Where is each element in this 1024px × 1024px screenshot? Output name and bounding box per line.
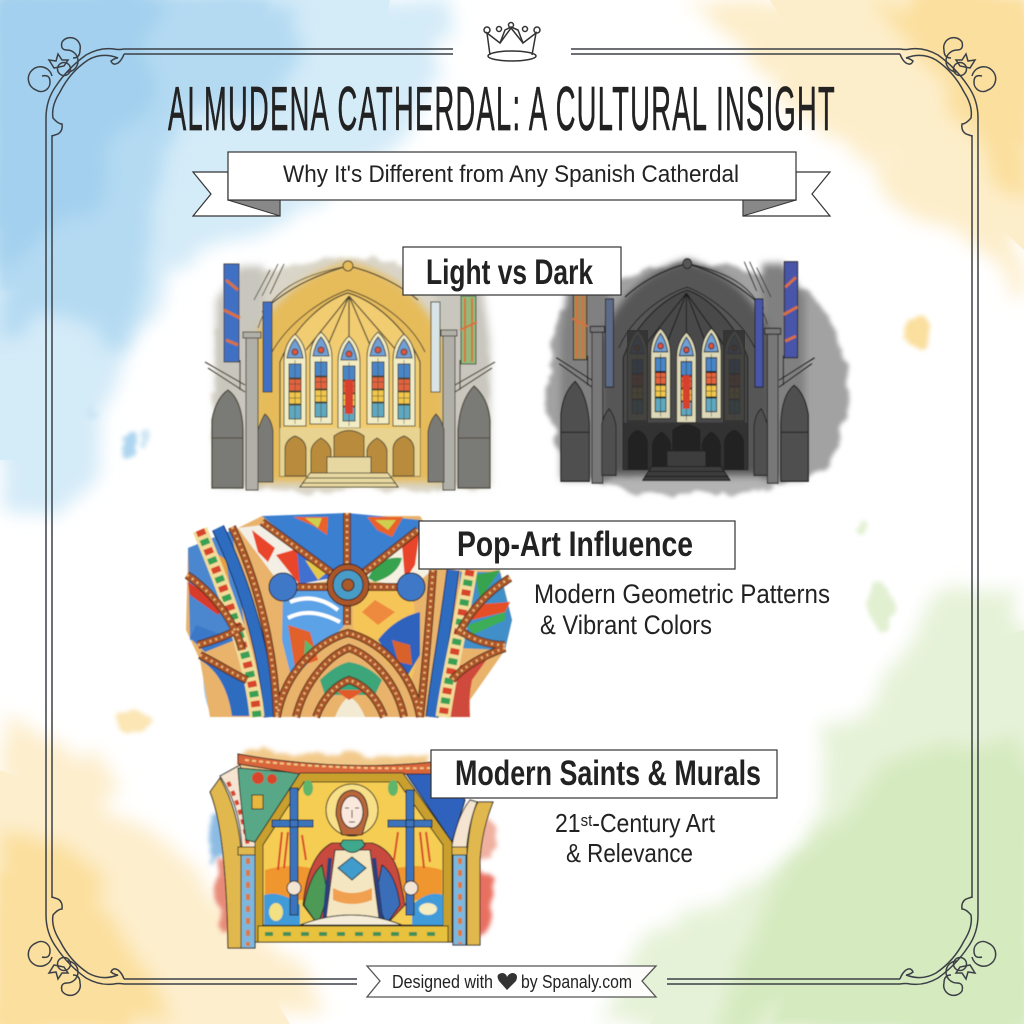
ribbon: right tail — [743, 172, 830, 216]
mural: left capital — [238, 847, 255, 855]
vault: blue bands — [218, 528, 453, 717]
vault: lower right orange panel — [353, 590, 420, 685]
frame: top left corner — [28, 38, 124, 136]
dark wash — [545, 266, 846, 491]
illustration: light cathedral interior — [205, 258, 495, 492]
label text: Modern Saints & Murals — [455, 754, 761, 793]
caption line 1: 21 — [555, 808, 584, 838]
vault: ornament strips — [200, 530, 470, 717]
rib: outline — [187, 513, 510, 717]
label box — [431, 750, 777, 798]
mural: right gold band — [467, 802, 493, 945]
mural: right ornament strip — [452, 800, 477, 855]
caption line 1: st — [581, 811, 593, 830]
mural: hands — [287, 881, 301, 895]
subtitle ribbon — [193, 152, 830, 216]
mural: red ribbons — [278, 832, 430, 870]
vault: top panels — [262, 513, 420, 585]
vault: central boss — [327, 564, 369, 606]
vault: left outer panels — [188, 530, 246, 640]
icon: crown — [484, 22, 540, 61]
label: Pop-Art Influence — [419, 521, 735, 569]
icon: heart — [498, 973, 517, 990]
mural: watercolor edges — [210, 752, 497, 940]
mural: hair and face — [336, 790, 368, 835]
mural: left spandrel floral — [238, 768, 300, 842]
wash: blue upper left — [0, 0, 440, 505]
label: Light vs Dark — [403, 247, 621, 295]
footer ribbon — [367, 966, 656, 997]
rib: dots — [187, 513, 510, 717]
illustration: pop-art vault — [186, 513, 512, 717]
caption line 2: & Vibrant Colors — [540, 610, 712, 640]
footer band — [367, 966, 656, 997]
frame: top right corner — [900, 38, 996, 136]
nave drawing — [205, 261, 495, 490]
mural: top arch band — [238, 754, 432, 774]
ribbon: folds — [228, 200, 796, 216]
caption: saints — [555, 808, 716, 868]
vault: orange chevrons — [293, 517, 403, 537]
mural: robe — [303, 843, 405, 925]
wash: yellow lower left — [0, 720, 330, 1024]
illustration: modern saint mural — [210, 752, 497, 948]
wash: yellow upper right — [700, 0, 1024, 300]
label text: Pop-Art Influence — [457, 525, 693, 564]
label text: Light vs Dark — [426, 253, 593, 292]
mural: base — [300, 915, 402, 925]
vault: lower left blue panel — [282, 590, 344, 680]
vault: lower left quarter — [200, 655, 250, 716]
mural: blue pools — [264, 894, 443, 925]
mural: bottom ornament band — [258, 926, 448, 942]
vault: upper right panel — [360, 530, 432, 586]
vault: side bosses — [269, 573, 425, 601]
mural: gold border — [255, 773, 452, 942]
vault: base colour — [186, 516, 512, 717]
vault: lower right red quarter — [450, 655, 490, 717]
wash: splashes — [88, 315, 931, 737]
label: Modern Saints & Murals — [431, 750, 777, 798]
vault: outer blue shadows — [203, 660, 250, 715]
mural: left ornament strip — [220, 765, 256, 848]
mural: left blue strip — [241, 855, 255, 948]
caption: pop-art — [534, 579, 830, 640]
mural: gold field — [263, 782, 443, 925]
mural: halo — [326, 784, 378, 836]
label box — [403, 247, 621, 295]
mural: left gold band — [210, 778, 241, 948]
vault: upper left panel — [238, 525, 335, 587]
vault: center lower panels — [320, 662, 382, 695]
mural: right capital — [452, 847, 467, 855]
label box — [419, 521, 735, 569]
caption line 1: -Century Art — [592, 808, 716, 838]
ribbon: left tail — [193, 172, 280, 216]
illustration: dark cathedral interior (mirrored) — [545, 259, 846, 495]
mural: orange band — [265, 866, 442, 900]
vault: right outer panels — [456, 572, 512, 650]
footer text left: Designed with — [392, 972, 493, 992]
dimmed outer lancets — [627, 330, 745, 426]
caption line 2: & Relevance — [566, 838, 693, 868]
mural: right blue strip — [453, 855, 466, 945]
caption line 1: Modern Geometric Patterns — [534, 579, 830, 609]
mural: green leaves — [303, 780, 313, 796]
dark nave drawing — [556, 259, 815, 483]
frame: bottom left corner — [28, 897, 124, 995]
frame: bottom right corner — [900, 897, 996, 995]
ribbon: band — [228, 152, 796, 200]
wash: green lower right — [600, 590, 1024, 1024]
mural: right spandrel blue — [405, 765, 465, 842]
rib: brown fill — [187, 513, 510, 717]
mural: crosses — [272, 788, 313, 915]
footer text right: by Spanaly.com — [521, 972, 632, 992]
subtitle text: Why It's Different from Any Spanish Catherdal — [283, 161, 739, 188]
vault: ribs — [187, 513, 510, 717]
floor wash — [605, 469, 775, 495]
watercolor wash — [215, 258, 486, 492]
